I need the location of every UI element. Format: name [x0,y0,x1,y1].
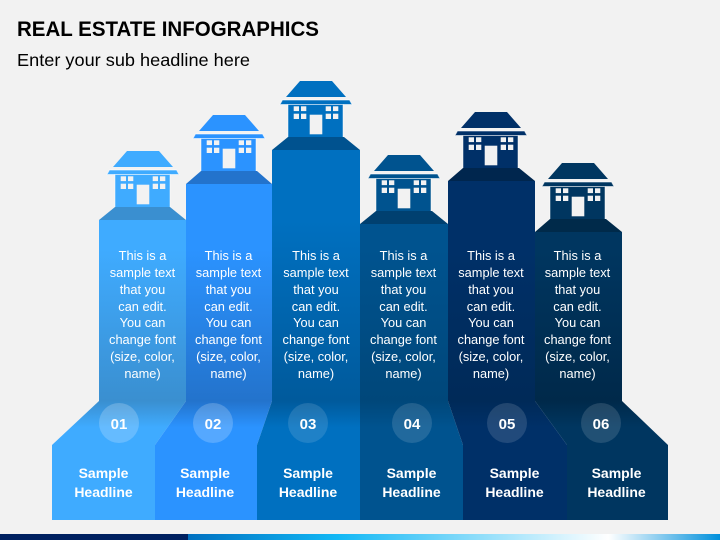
headline 05: Headline [485,484,544,500]
text block 03: can edit. [292,299,340,314]
text block 02: sample text [196,265,262,280]
text block 04: This is a [380,248,428,263]
text block 05: change font [458,332,525,347]
panel: column 01 [52,151,186,520]
text block 01: This is a [119,248,167,263]
text block 02: You can [206,315,251,330]
headline 01 [74,465,133,500]
number badge 03 [288,403,328,443]
text block 05: You can [468,315,514,330]
text block 06: This is a [554,248,602,263]
headline 03: Sample [283,465,333,481]
text block 04: that you [381,282,426,297]
text block 06: (size, color, [545,349,610,364]
text block 02 [195,248,262,381]
headline 02: Headline [176,484,234,500]
text block 04: change font [370,332,437,347]
text block 01: sample text [110,265,176,280]
text block 04: You can [381,315,426,330]
text block 05: sample text [458,265,524,280]
number badge 03: 03 [300,416,316,433]
text block 05: that you [468,282,514,297]
text block 01: You can [120,315,165,330]
text block 03: You can [293,315,339,330]
number badge 06: 06 [593,416,609,433]
headline 06: Sample [592,465,642,481]
headline 05: Sample [490,465,540,481]
text block 03 [283,248,350,381]
number badge 01: 01 [111,416,127,433]
text block 03: that you [293,282,339,297]
text block 01: name) [124,366,161,381]
text block 05: name) [473,366,509,381]
text block 06 [544,248,611,381]
headline 04 [382,465,441,500]
text block 06: You can [555,315,600,330]
text block 06: can edit. [553,299,602,314]
text block 04: (size, color, [371,349,436,364]
text block 03: (size, color, [284,349,348,364]
headline 02 [176,465,234,500]
headline 03: Headline [279,484,337,500]
number badge 06 [581,403,621,443]
text block 04: can edit. [379,299,428,314]
text block 03: name) [298,366,334,381]
text block 05: can edit. [467,299,515,314]
text block 04: sample text [371,265,437,280]
number badge 02: 02 [205,416,221,433]
text block 05: (size, color, [459,349,523,364]
headline 02: Sample [180,465,230,481]
panel: column 04 [360,155,463,520]
text block 06: name) [559,366,596,381]
text block 02: This is a [205,248,253,263]
text block 02: (size, color, [196,349,261,364]
house icon 03 [280,81,352,138]
text block 02: can edit. [204,299,253,314]
panel: column 05 [448,112,567,520]
text block 06: sample text [545,265,611,280]
headline 06: Headline [587,484,646,500]
subtitle: Enter your sub headline here [17,50,250,70]
text block 05 [458,248,525,381]
text block 02: that you [206,282,251,297]
number badge 04 [392,403,432,443]
text block 06: change font [544,332,611,347]
number badge 05 [487,403,527,443]
panel: column 06 [535,163,668,520]
text block 03: sample text [283,265,349,280]
text block 02: name) [210,366,247,381]
headline 05 [485,465,544,500]
headline 06 [587,465,646,500]
house icon 01 [107,151,179,208]
text block 03: This is a [292,248,341,263]
title: REAL ESTATE INFOGRAPHICS [17,17,319,41]
text block 02: change font [195,332,262,347]
text block 04: name) [385,366,422,381]
number badge 01 [99,403,139,443]
headline 01: Sample [79,465,129,481]
text block 06: that you [555,282,600,297]
text block 01: (size, color, [110,349,175,364]
text block 01: can edit. [118,299,167,314]
panel: column 03 [257,81,360,520]
panel: column 02 [155,115,272,520]
headline 04: Sample [387,465,437,481]
headline 01: Headline [74,484,133,500]
house icon 05 [455,112,527,170]
text block 04 [370,248,437,381]
text block 01: that you [120,282,165,297]
text block 03: change font [283,332,350,347]
headline 04: Headline [382,484,441,500]
headline 03 [279,465,337,500]
number badge 05: 05 [499,416,515,433]
footer bar [0,534,720,540]
house icon 06 [542,163,614,220]
text block 01: change font [109,332,176,347]
house icon 02 [193,115,265,172]
number badge 02 [193,403,233,443]
house icon 04 [368,155,440,212]
text block 05: This is a [467,248,516,263]
text block 01 [109,248,176,381]
number badge 04: 04 [404,416,421,433]
